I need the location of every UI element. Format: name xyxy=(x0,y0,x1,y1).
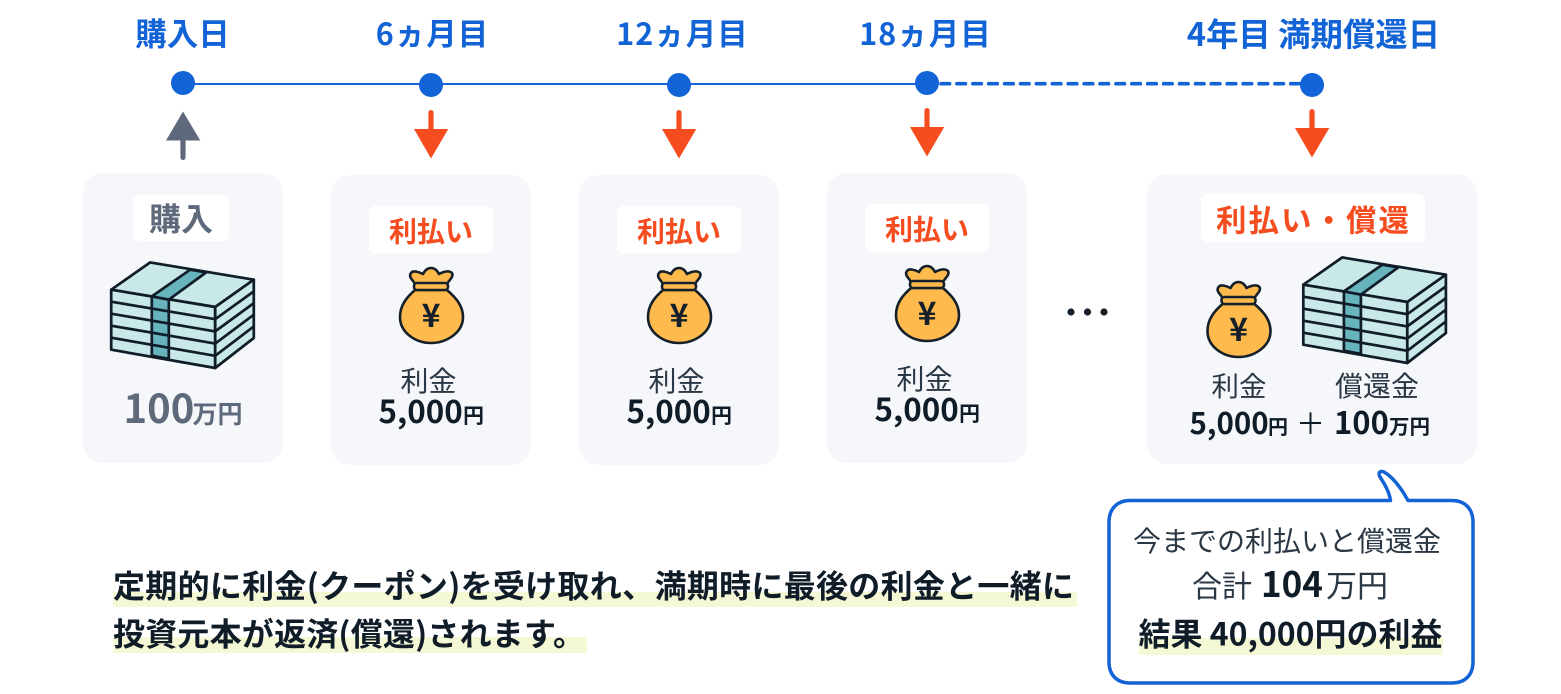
panel: 6 months xyxy=(331,175,531,465)
callout text: line 3: 結果 40,000円の利益 xyxy=(1138,610,1443,656)
summary line 1: 定期的に利金(クーポン)を受け取れ、満期時に最後の利金と一緒に xyxy=(113,562,1074,608)
icon: money bag xyxy=(1208,282,1270,357)
badge: interest payment: 利払い xyxy=(637,210,721,250)
badge: purchase: 購入 xyxy=(149,194,213,240)
icon: money bag: ¥ xyxy=(422,291,441,337)
icon: money bag: ¥ xyxy=(1229,305,1248,351)
icon: money bag xyxy=(896,266,959,341)
amount: 5,000 yen: 円 xyxy=(959,398,980,428)
icon: money bag: ¥ xyxy=(918,289,937,335)
timeline label: 12 months: 12ヵ月目 xyxy=(616,10,749,54)
amount: interest plus principal: 5,000 xyxy=(1190,401,1269,443)
timeline dots xyxy=(171,71,1324,97)
callout text: line 2: 104 xyxy=(1261,557,1323,608)
amount: interest plus principal: ＋ xyxy=(1296,401,1325,443)
timeline xyxy=(135,9,1440,97)
icon: money bag: ¥ xyxy=(670,291,689,337)
amount: interest plus principal: 100 xyxy=(1334,398,1389,443)
timeline dashed line xyxy=(941,82,1300,85)
arrow: payment at maturity xyxy=(1295,109,1329,158)
callout text: line 2: 万円 xyxy=(1326,561,1388,606)
timeline label: purchase date: 購入日 xyxy=(135,9,230,55)
icon: banknote stack xyxy=(1303,257,1446,363)
ellipsis xyxy=(1067,308,1108,316)
panel: 12 months xyxy=(579,175,779,465)
badge: interest payment: 利払い xyxy=(389,210,473,250)
amount: interest plus principal: 円 xyxy=(1268,411,1288,440)
icon: money bag xyxy=(648,268,711,343)
panel: 18 months xyxy=(827,173,1027,463)
timeline solid line xyxy=(183,83,927,85)
badge: interest payment xyxy=(369,206,493,254)
icon: money bag xyxy=(400,268,463,343)
summary line 2: 投資元本が返済(償還)されます。 xyxy=(113,610,585,656)
panel: maturity xyxy=(1147,174,1477,464)
amount: 5,000 yen: 5,000 xyxy=(874,386,959,431)
label: interest: 利金 xyxy=(1212,364,1266,404)
amount: 5,000 yen: 円 xyxy=(711,400,732,430)
callout bubble xyxy=(1109,471,1473,683)
timeline label: 18 months: 18ヵ月目 xyxy=(859,10,992,54)
summary text xyxy=(113,562,1077,656)
label: redemption money: 償還金 xyxy=(1335,365,1419,405)
amount: 5,000 yen: 5,000 xyxy=(378,388,463,433)
callout: total result xyxy=(1109,471,1473,683)
highlight xyxy=(1139,638,1443,655)
icon: banknote stack xyxy=(111,262,254,368)
arrow: purchase up xyxy=(166,112,200,160)
timeline label: 6 months: 6ヵ月目 xyxy=(376,10,489,54)
timeline label: maturity date: 4年目 満期償還日 xyxy=(1187,9,1440,56)
badge: interest payment: 利払い xyxy=(885,208,969,248)
highlight: line 2 xyxy=(113,637,587,653)
amount: interest plus principal: 万円 xyxy=(1389,410,1430,440)
arrow: payment 6 months xyxy=(414,110,448,158)
badge: purchase xyxy=(133,194,229,241)
amount: 1 million yen: 100 xyxy=(124,377,194,435)
callout text: line 2: 合計 xyxy=(1192,562,1252,606)
amount: 1 million yen: 万円 xyxy=(192,395,243,431)
badge: interest payment xyxy=(617,206,741,254)
amount: 5,000 yen: 円 xyxy=(463,400,484,430)
highlight: line 1 xyxy=(113,592,1077,607)
arrow: payment 12 months xyxy=(662,110,696,158)
badge: interest and redemption: 利払い・償還 xyxy=(1216,196,1411,240)
label: interest: 利金 xyxy=(896,358,953,398)
amount: 5,000 yen: 5,000 xyxy=(626,388,711,433)
label: interest: 利金 xyxy=(648,360,705,400)
panel: purchase xyxy=(83,173,283,463)
arrow: payment 18 months xyxy=(910,108,944,156)
callout text: line 1: 今までの利払いと償還金 xyxy=(1133,520,1441,560)
badge: interest payment xyxy=(865,204,989,252)
label: interest: 利金 xyxy=(400,360,457,400)
